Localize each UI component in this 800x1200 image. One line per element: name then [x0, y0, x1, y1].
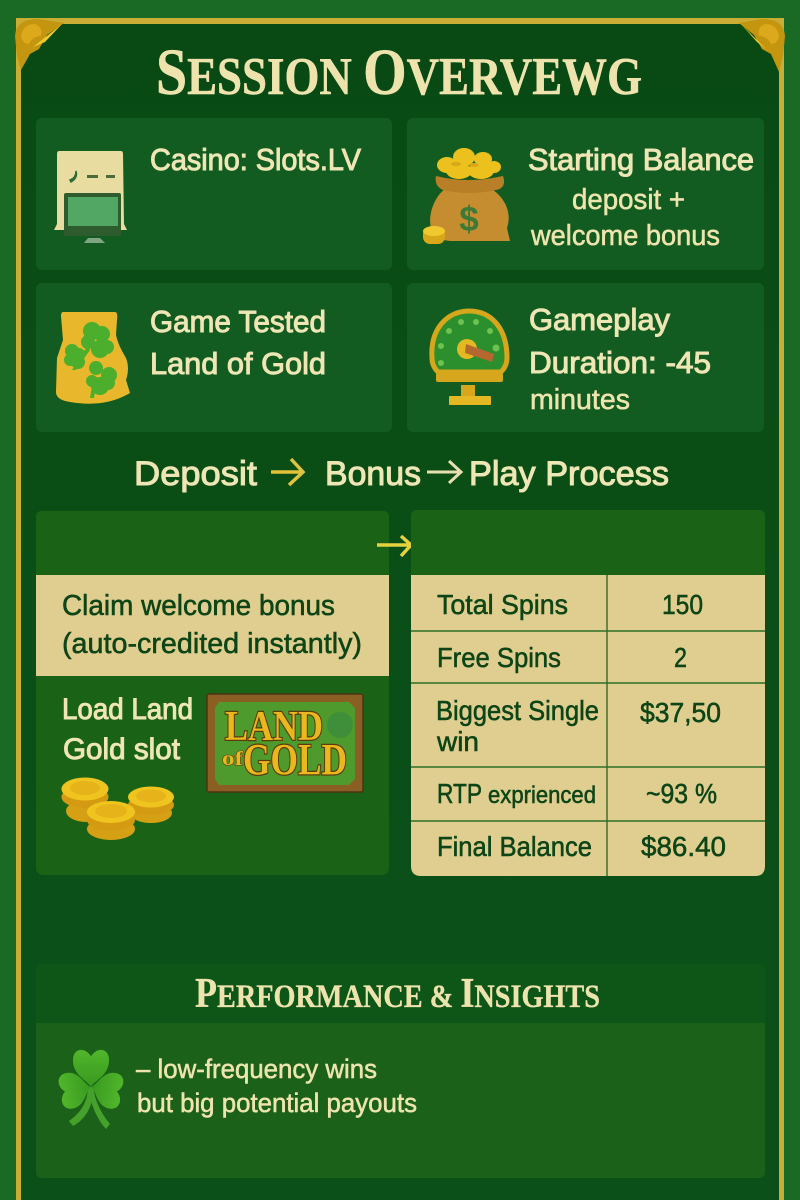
panel: session results — [411, 510, 765, 876]
text: duration: Duration: -45 — [529, 345, 711, 380]
text: casino: Casino: Slots.LV — [150, 142, 361, 177]
panel: performance and insights — [36, 964, 765, 1178]
band: claim bonus — [36, 575, 389, 676]
row: free spins: 2 — [674, 642, 687, 673]
text: land of gold: Land of Gold — [150, 346, 326, 381]
panel: process steps — [36, 511, 389, 875]
row: biggest single win: $37,50 — [640, 697, 721, 728]
row: total spins: 150 — [662, 589, 703, 620]
row: rtp experienced: ~93 % — [646, 778, 717, 809]
row: free spins — [437, 642, 687, 673]
icon: money bag — [423, 148, 510, 244]
icon: clover sack — [56, 312, 130, 404]
row: biggest single win: Biggest Single — [436, 695, 599, 726]
row: free spins: Free Spins — [437, 642, 561, 673]
panel: casino — [36, 118, 392, 270]
text: minutes: minutes — [530, 384, 630, 416]
text: game tested: Game Tested — [150, 304, 326, 339]
icon: money bag: $ — [459, 200, 479, 239]
text: low-frequency wins: – low-frequency wins — [136, 1054, 377, 1084]
icon: top-right corner ornament — [739, 19, 785, 72]
row: final balance: Final Balance — [437, 831, 592, 862]
text: big potential payouts: but big potential payouts — [137, 1088, 417, 1118]
panel: game tested — [36, 283, 392, 432]
row: total spins: Total Spins — [437, 589, 568, 620]
icon: gauge timer — [432, 311, 507, 405]
row: biggest single win: win — [436, 726, 479, 757]
icon: casino machine — [54, 151, 127, 243]
text: load land: Load Land — [62, 693, 193, 726]
heading: process — [134, 455, 669, 493]
icon: shamrock — [57, 1050, 125, 1129]
arrow: bonus to play — [427, 461, 461, 483]
band: claim bonus: Claim welcome bonus — [62, 590, 335, 622]
row: rtp experienced: RTP — [437, 778, 482, 809]
arrow: steps to results — [377, 536, 411, 556]
row: final balance: $86.40 — [641, 831, 726, 862]
heading: performance and insights: PERFORMANCE & INSIGHTS — [195, 971, 600, 1017]
text: starting balance heading: Starting Balance — [528, 142, 754, 177]
badge: land of gold — [207, 694, 363, 792]
table: session results — [411, 575, 765, 876]
row: biggest single win — [436, 695, 721, 757]
row: total spins — [437, 589, 703, 620]
text: deposit: deposit + — [572, 184, 685, 216]
arrow: deposit to bonus — [271, 459, 303, 485]
text: welcome bonus: welcome bonus — [530, 220, 720, 252]
text: gameplay: Gameplay — [529, 302, 670, 337]
heading: process: Bonus — [325, 455, 421, 493]
panel: starting balance — [407, 118, 764, 270]
row: rtp experienced: exprienced — [488, 782, 596, 809]
band: claim bonus: (auto-credited instantly) — [62, 628, 362, 660]
text: gold slot: Gold slot — [63, 733, 181, 766]
panel: gameplay duration — [407, 283, 764, 432]
badge: land of gold: LAND — [225, 704, 323, 750]
badge: land of gold: of — [222, 748, 243, 770]
heading: process: Play Process — [469, 455, 669, 493]
title: SESSION OVERVEWG — [156, 36, 642, 109]
icon: gold coin stacks — [62, 778, 174, 840]
badge: land of gold: GOLD — [243, 735, 347, 784]
row: final balance — [437, 831, 726, 862]
icon: top-left corner ornament — [15, 19, 64, 70]
heading: process: Deposit — [134, 455, 258, 493]
row: rtp experienced — [437, 778, 717, 809]
